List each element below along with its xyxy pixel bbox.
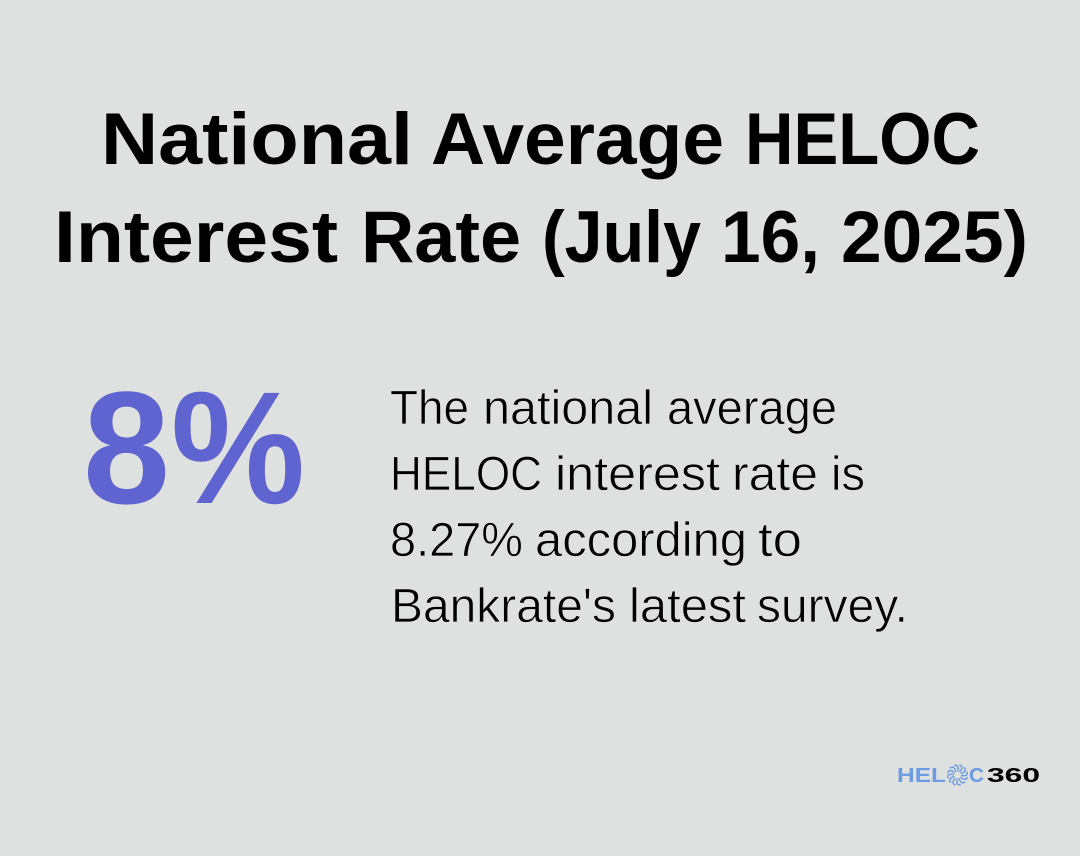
big stat: 8%: 8: [83, 358, 170, 537]
description text: average: [667, 382, 837, 435]
title: Average: [431, 99, 724, 180]
description text: Bankrate's: [391, 580, 616, 633]
title: 16,: [721, 197, 820, 278]
description text: national: [483, 382, 653, 435]
description text: HELOC: [390, 448, 542, 501]
description text: [390, 382, 908, 633]
title: 2025): [841, 197, 1028, 278]
description text: rate: [732, 448, 818, 501]
icon: logo swirl: [947, 764, 968, 786]
description text: latest: [629, 580, 746, 633]
description text: 8.27%: [390, 514, 523, 567]
big stat: 8%: %: [171, 358, 305, 537]
title: Interest: [54, 197, 338, 278]
logo: HELOC360: 360: [987, 765, 1040, 787]
title: (July: [542, 197, 701, 278]
description text: The: [390, 382, 469, 435]
logo: HELOC360: C: [969, 765, 984, 787]
title: [54, 99, 1028, 278]
description text: to: [758, 514, 802, 567]
logo: HELOC360: HEL: [897, 765, 946, 787]
description text: survey.: [757, 580, 908, 633]
big stat: 8%: [83, 358, 305, 537]
description text: interest: [555, 448, 720, 501]
title: HELOC: [745, 99, 980, 180]
description text: is: [831, 448, 865, 501]
title: National: [101, 99, 413, 180]
title: Rate: [361, 197, 521, 278]
logo: HELOC360: [897, 764, 1040, 787]
description text: according: [535, 514, 747, 567]
